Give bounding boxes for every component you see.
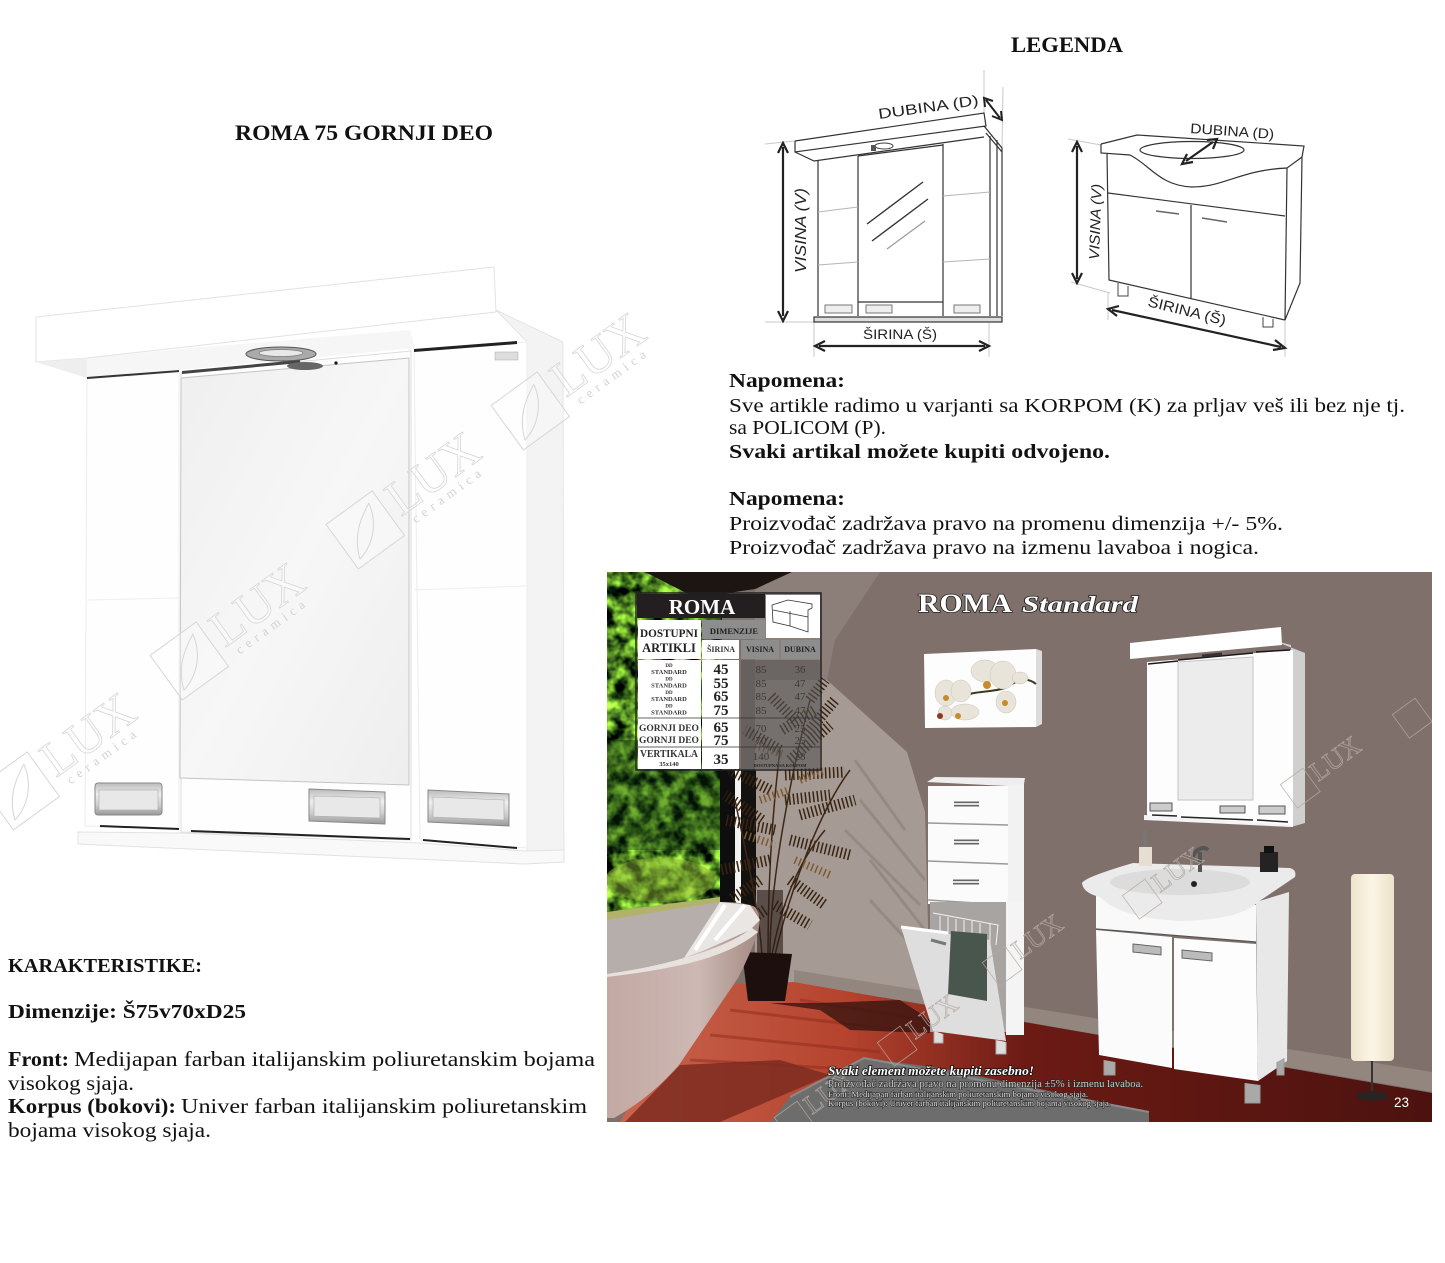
top shelf bbox=[36, 267, 496, 362]
window foliage bbox=[607, 572, 722, 917]
base bbox=[78, 832, 564, 864]
tilt-out laundry door bbox=[901, 927, 1006, 1041]
wire basket bbox=[933, 913, 998, 945]
dimensions table: STANDARD bbox=[651, 682, 687, 690]
legend diagram: base unit dimensions: DUBINA (D) bbox=[1190, 120, 1275, 142]
mirror bbox=[180, 358, 409, 785]
left door bbox=[85, 372, 179, 828]
watermark: LUX ceramica 2: LUX bbox=[199, 551, 315, 657]
legend diagram: base unit dimensions: VISINA (V) bbox=[1087, 184, 1106, 260]
arrow: height bbox=[1072, 142, 1082, 283]
dimensions table: 25 bbox=[794, 735, 806, 747]
page number: 23 bbox=[1394, 1095, 1409, 1110]
watermark: LUX ceramica 1: ceramica bbox=[64, 724, 143, 787]
dimensions table bbox=[636, 593, 821, 770]
bottle bbox=[1260, 852, 1278, 872]
watermark: LUX ceramica 4: ceramica bbox=[574, 344, 653, 407]
ceiling bbox=[645, 572, 792, 594]
legend diagram: base unit dimensions bbox=[1068, 120, 1304, 357]
dimensions table: STANDARD bbox=[651, 696, 687, 703]
photo caption: Korpus (bokovi): Univer farban italijanskim poliuretanskim bojama visokog sjaja. bbox=[828, 1098, 1111, 1108]
shadow under shelf bbox=[87, 369, 179, 379]
floor bbox=[620, 982, 1432, 1122]
arrow: width bbox=[1108, 306, 1285, 350]
catalog photo: bathroom scene bbox=[605, 572, 1432, 1141]
product image: wall cabinet with mirror bbox=[36, 267, 564, 864]
handles bbox=[95, 783, 509, 826]
watermark: LUX ceramica 3: ceramica bbox=[409, 463, 488, 526]
legend diagram: upper cabinet dimensions bbox=[765, 70, 1003, 357]
orchid canvas picture bbox=[924, 649, 1042, 728]
watermarks in photo bbox=[772, 698, 1432, 1141]
dimensions table: 75 bbox=[714, 733, 728, 749]
text block: notes: Svaki artikal možete kupiti odvojeno. bbox=[729, 441, 1110, 463]
dimensions table: DD bbox=[665, 691, 673, 696]
dimensions table: 140 bbox=[753, 751, 770, 763]
arrow: height bbox=[778, 143, 788, 321]
text block: notes: Napomena: bbox=[729, 488, 845, 510]
text block: characteristics: visokog sjaja. bbox=[8, 1071, 134, 1095]
dimensions table: 85 bbox=[756, 705, 767, 717]
dimensions table: STANDARD bbox=[651, 710, 687, 716]
text block: characteristics: Korpus (bokovi): bbox=[8, 1094, 176, 1118]
dimensions table: DOSTUPNI bbox=[640, 626, 698, 640]
watermarks in photo: LUX bbox=[1146, 841, 1209, 898]
arrow: depth bbox=[984, 98, 1002, 120]
photo caption bbox=[828, 1064, 1143, 1108]
dimensions table: 65 bbox=[714, 720, 728, 736]
watermark: LUX ceramica 3 bbox=[322, 420, 494, 569]
watermarks in photo: LUX bbox=[901, 988, 964, 1045]
mini wall cabinet bbox=[1130, 627, 1305, 827]
text block: characteristics: Dimenzije: Š75v70xD25 bbox=[8, 999, 246, 1023]
dimensions table: 47 bbox=[794, 705, 806, 717]
dimensions table: 47 bbox=[794, 691, 806, 703]
wall bbox=[607, 572, 1432, 1122]
floor lamp bbox=[1351, 874, 1394, 1101]
watermarks in photo: LUX bbox=[1304, 730, 1367, 787]
dimensions table: 45 bbox=[714, 662, 728, 678]
watermarks in photo: LUX bbox=[1006, 908, 1069, 965]
legend diagram: base unit dimensions: ŠIRINA (Š) bbox=[1146, 293, 1228, 329]
dimensions table: ARTIKLI bbox=[642, 641, 696, 655]
center door bbox=[181, 351, 411, 840]
dimensions table: DIMENZIJE bbox=[710, 626, 758, 636]
plant bbox=[720, 680, 855, 955]
vanity cabinet bbox=[1082, 830, 1295, 1103]
rug bbox=[770, 1058, 1149, 1122]
window frame bbox=[720, 770, 735, 905]
title: product name: ROMA 75 GORNJI DEO bbox=[235, 120, 493, 145]
baseboard bbox=[794, 970, 1432, 1092]
dimensions table: 35x140 bbox=[659, 761, 679, 768]
dimensions table: 85 bbox=[756, 664, 767, 676]
dimensions table: DD bbox=[665, 678, 673, 682]
wall shadows of plant bbox=[845, 760, 925, 960]
legend diagram: upper cabinet dimensions: DUBINA (D) bbox=[877, 93, 980, 123]
text block: characteristics: KARAKTERISTIKE: bbox=[8, 955, 202, 977]
watermark: LUX ceramica 4 bbox=[487, 301, 659, 450]
dimensions table: 65 bbox=[714, 689, 728, 705]
dimensions table: 28 bbox=[794, 751, 806, 763]
dimensions table: GORNJI DEO bbox=[639, 736, 699, 746]
text block: notes: Proizvođač zadržava pravo na izmenu lavaboa i nogica. bbox=[729, 537, 1259, 559]
text block: characteristics: Medijapan farban italijanskim poliuretanskim bojama bbox=[74, 1047, 596, 1071]
faucet bbox=[1192, 848, 1208, 872]
text block: notes bbox=[729, 370, 1405, 559]
dimensions table: 25 bbox=[794, 723, 806, 735]
towel bbox=[948, 931, 987, 1001]
photo caption: Proizvođač zadržava pravo na promenu dimenzija ±5% i izmenu lavaboa. bbox=[828, 1079, 1143, 1090]
scene title bbox=[918, 594, 1140, 613]
dimensions table: 47 bbox=[794, 678, 806, 690]
table rows bbox=[638, 660, 701, 769]
washbasin bbox=[1082, 863, 1295, 921]
dimensions table: VERTIKALA bbox=[640, 749, 699, 760]
lamp bbox=[246, 347, 316, 361]
arrow: depth bbox=[1182, 139, 1217, 164]
floor dark reflection bbox=[625, 1060, 830, 1122]
dimensions table: ŠIRINA bbox=[707, 644, 735, 654]
dimensions table: GORNJI DEO bbox=[639, 724, 699, 734]
text block: characteristics: bojama visokog sjaja. bbox=[8, 1118, 211, 1142]
watermark: LUX ceramica 1: LUX bbox=[30, 681, 146, 787]
title: legend: LEGENDA bbox=[1011, 32, 1123, 57]
table icon bbox=[766, 595, 820, 638]
watermark: LUX ceramica 2: ceramica bbox=[233, 594, 312, 657]
dimensions table: DOSTUPNA SA KORPOM bbox=[753, 763, 807, 768]
watermark: LUX ceramica 2 bbox=[146, 551, 318, 700]
dimensions table: 35 bbox=[714, 752, 728, 768]
gaps above base bbox=[100, 826, 517, 848]
arrow: width bbox=[815, 341, 989, 351]
text block: notes: sa POLICOM (P). bbox=[729, 417, 886, 439]
legend diagram: upper cabinet dimensions: VISINA (V) bbox=[793, 188, 810, 273]
table header bbox=[637, 594, 765, 618]
table column headings bbox=[638, 620, 701, 659]
text block: characteristics bbox=[8, 955, 596, 1142]
dimensions table: 55 bbox=[714, 676, 728, 692]
text block: notes: Proizvođač zadržava pravo na promenu dimenzija +/- 5%. bbox=[729, 513, 1283, 535]
tall cabinet bbox=[901, 777, 1025, 1054]
watermark: LUX ceramica 1 bbox=[0, 681, 149, 830]
watermark: LUX ceramica 4: LUX bbox=[540, 301, 656, 407]
text block: notes: Sve artikle radimo u varjanti sa KORPOM (K) za prljav veš ili bez nje tj. bbox=[729, 395, 1405, 417]
dimensions table: ROMA bbox=[669, 595, 736, 619]
photo caption: Front: Medijapan farban italijanskim poliuretanskim bojama visokog sjaja. bbox=[828, 1089, 1088, 1099]
photo caption: Svaki element možete kupiti zasebno! bbox=[828, 1064, 1034, 1078]
dimensions table: 70 bbox=[756, 735, 767, 747]
watermark: LUX ceramica 3: LUX bbox=[375, 420, 491, 526]
text block: characteristics: Univer farban italijanskim poliuretanskim bbox=[181, 1094, 587, 1118]
dimensions table: 75 bbox=[714, 703, 728, 719]
bathtub bbox=[607, 902, 760, 1118]
text block: characteristics: Front: bbox=[8, 1047, 69, 1071]
dimensions table: 36 bbox=[794, 664, 806, 676]
soap bbox=[1139, 847, 1152, 866]
legend diagram: upper cabinet dimensions: ŠIRINA (Š) bbox=[863, 326, 937, 342]
dimensions table: 85 bbox=[756, 691, 767, 703]
dimensions table: 70 bbox=[756, 723, 767, 735]
right door bbox=[414, 342, 527, 848]
scene title: Standard bbox=[1022, 592, 1139, 617]
plant pot bbox=[742, 952, 792, 1001]
dimensions table: STANDARD bbox=[651, 669, 687, 676]
dimensions table: 85 bbox=[756, 678, 767, 690]
cabinet side panel bbox=[496, 310, 564, 862]
dimensions table: DD bbox=[665, 664, 673, 669]
scene title: ROMA bbox=[918, 589, 1012, 618]
watermarks in photo: LUX bbox=[798, 1063, 861, 1120]
dimensions table: DUBINA bbox=[784, 645, 816, 654]
logo bbox=[495, 352, 518, 360]
plant floor shadow bbox=[770, 1000, 930, 1033]
dimensions table: VISINA bbox=[746, 645, 774, 654]
text block: notes: Napomena: bbox=[729, 370, 845, 392]
dimensions table: DD bbox=[665, 704, 673, 710]
seams bbox=[87, 586, 527, 600]
